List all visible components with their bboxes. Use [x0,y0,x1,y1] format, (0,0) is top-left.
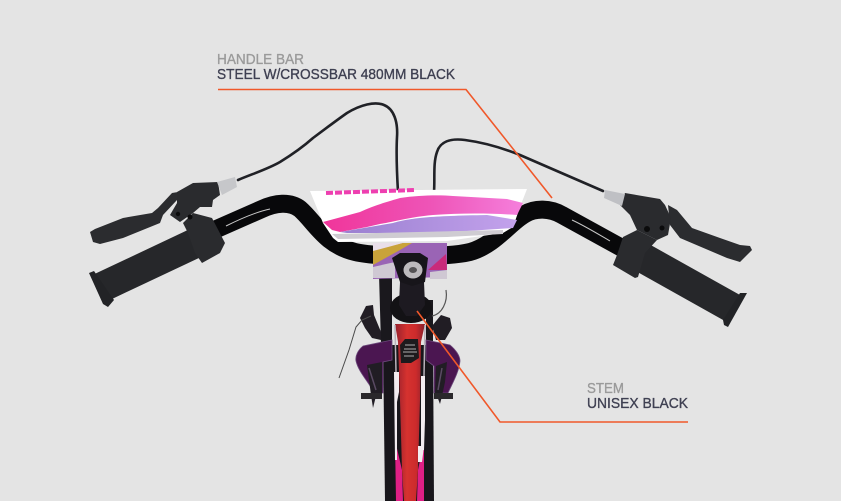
label: stem: UNISEX BLACK [587,395,688,412]
left grip assembly [89,177,237,307]
front tyre [383,345,434,501]
stem [390,253,432,323]
lilac swoosh [340,215,517,233]
left clamp screws [176,212,180,216]
lock ring [390,293,432,323]
right clamp body [620,193,671,240]
handlebar highlights [226,209,610,241]
label: stem: STEM [587,380,624,397]
right brake lever [668,205,752,262]
pink swoosh [323,195,523,232]
steerer strut [379,274,433,345]
purple hanging tag [373,243,447,279]
trailing brake wire [339,316,371,378]
white decals on tube [394,372,425,462]
right grip [636,254,736,310]
right brake arm [432,315,452,404]
stem bolt [404,262,422,278]
brake cables [238,103,603,192]
bicycle front: tyre, frame and fork [339,274,460,501]
badge text lines [403,345,417,356]
label: handle bar: HANDLE BAR [217,51,304,68]
red head tube [395,324,425,501]
loose cable [432,290,446,316]
brake pad detail [369,368,442,390]
left ferrule [217,177,237,195]
silver tube edges [395,325,425,376]
left collar [183,213,225,263]
brake bolts [361,393,453,399]
label: handle bar [217,51,455,83]
stem shaft [399,282,425,316]
white corner [373,243,403,252]
magenta corner [428,254,447,270]
purple fork crown [356,340,460,393]
right collar [613,230,657,278]
left grip [98,239,204,289]
right grip end cap [723,293,747,327]
left brake arm [360,305,382,408]
label: handle bar: STEEL W/CROSSBAR 480MM BLACK [217,66,455,83]
left clamp body [170,182,220,222]
leader line: handle bar [218,90,552,198]
pink frame stripes [395,440,424,501]
yellow band [373,243,412,265]
right ferrule [604,190,625,206]
left grip end cap [89,271,114,307]
left brake lever [90,192,178,244]
right clamp screws [644,226,650,232]
stem head [392,253,428,286]
leader line: stem [417,311,688,422]
black head badge [400,339,419,363]
label: stem [587,380,688,412]
silver lower edge [332,230,503,239]
handlebar [212,204,622,256]
handlebar card [310,189,527,242]
pink card lettering [326,190,415,193]
right grip assembly [604,190,752,327]
white fold [373,262,447,279]
